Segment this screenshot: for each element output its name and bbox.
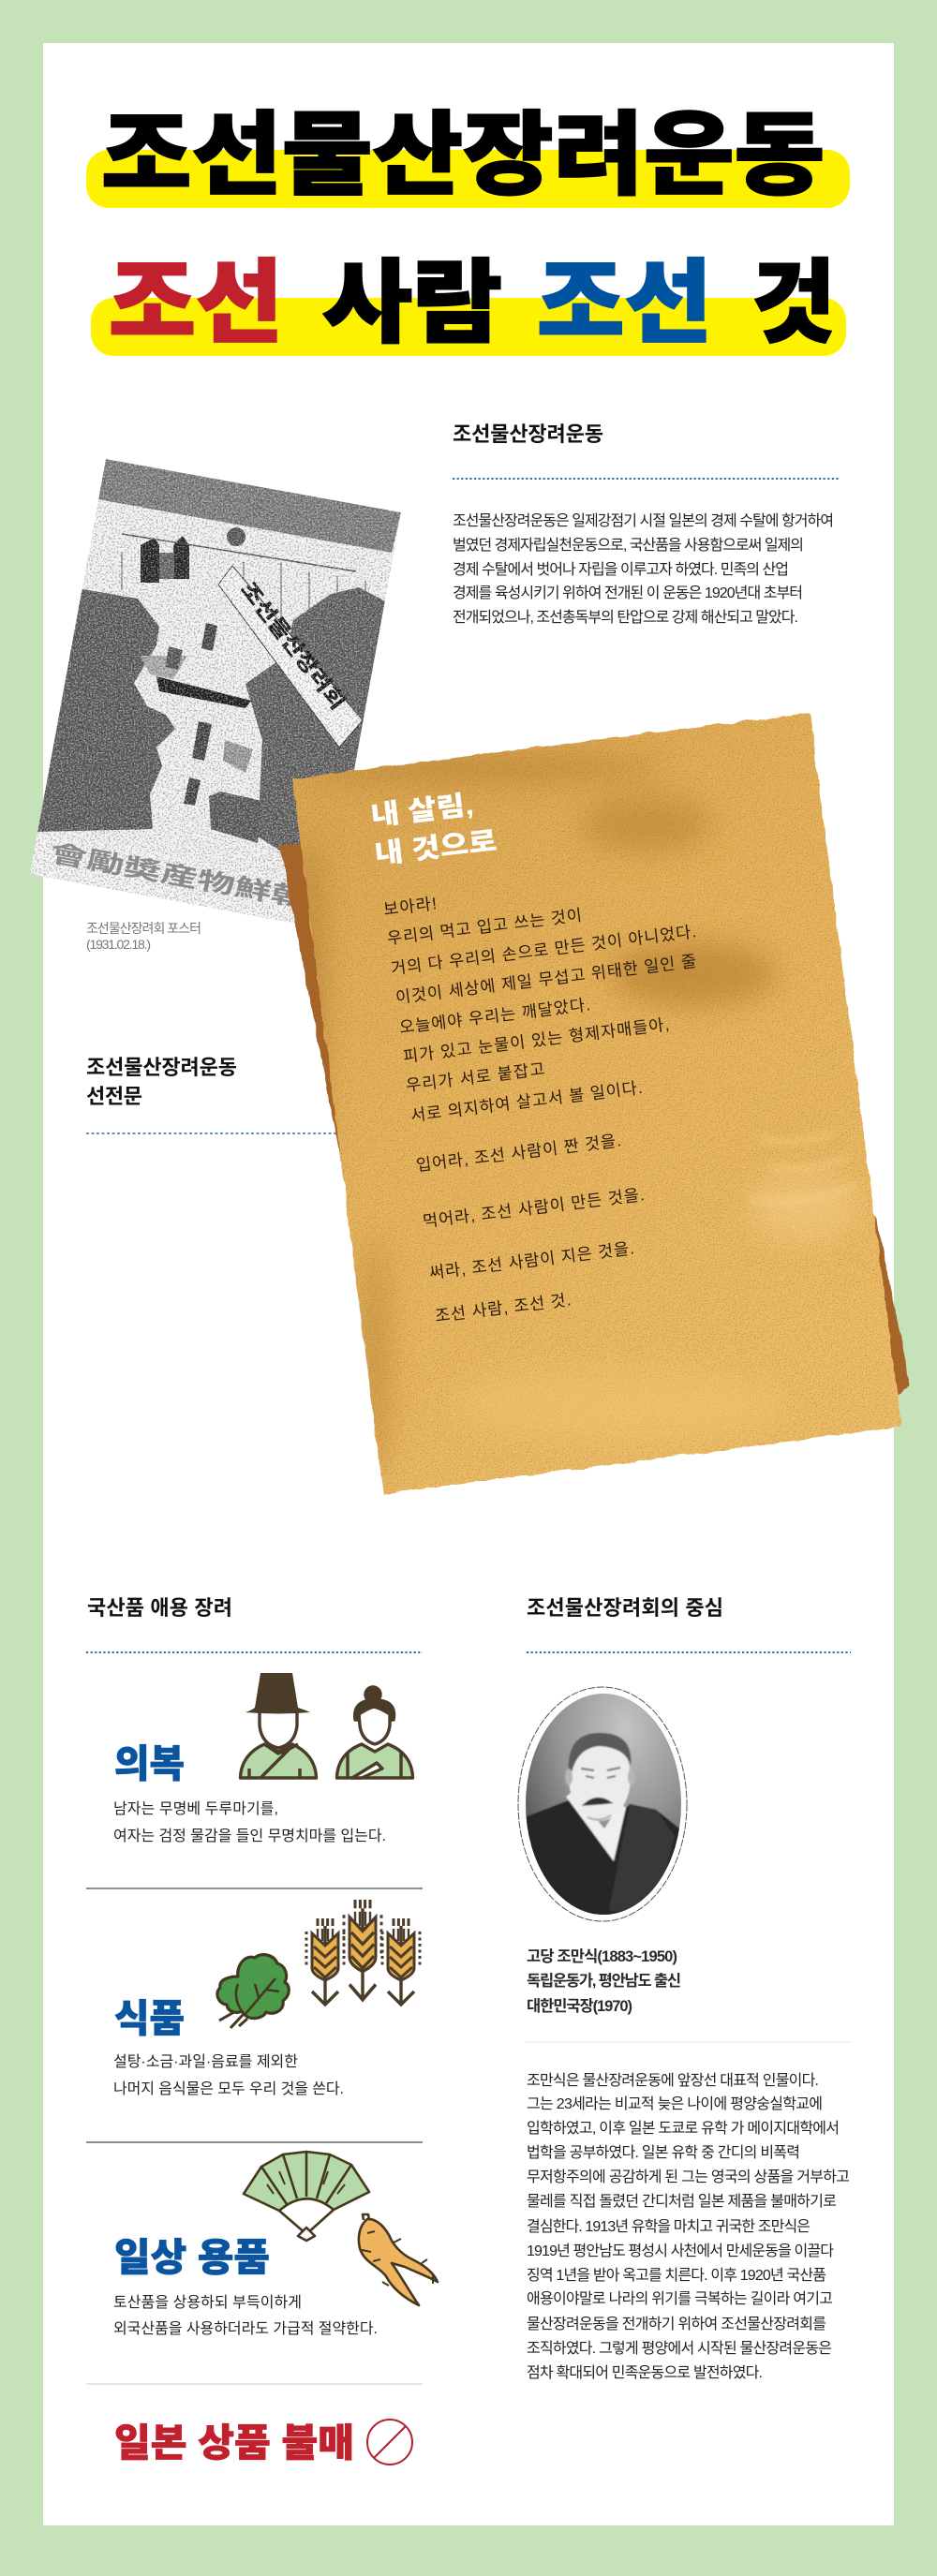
manifesto text: 오늘에야 우리는 깨달았다. [398, 995, 591, 1037]
heading: 국산품 애용 장려: 국산품 애용 장려 [87, 1596, 232, 1620]
manifesto text [382, 894, 697, 1325]
paper stains [298, 755, 862, 1480]
biography text block: 무저항주의에 공감하게 된 그는 영국의 상품을 거부하고 [527, 2169, 850, 2185]
section: 의복: 남자는 무명베 두루마기를, [113, 1800, 278, 1817]
section: 의복: 여자는 검정 물감을 들인 무명치마를 입는다. [113, 1828, 386, 1844]
biography text block: 조만식은 물산장려운동에 앞장선 대표적 인물이다. [527, 2072, 819, 2089]
heading: 조선물산장려회의 중심: 조선물산장려회의 중심 [527, 1596, 723, 1620]
front paper sheet [292, 713, 901, 1494]
intro text block: 조선물산장려운동은 일제강점기 시절 일본의 경제 수탈에 항거하여 [453, 512, 834, 529]
subtitle: 조선 사람 조선 것: 사람 [322, 252, 502, 354]
dotted divider for 선전문 [86, 1133, 347, 1134]
icon: man in hanbok [240, 1673, 317, 1778]
section: 식품 [113, 1997, 344, 2097]
heading: 조선물산장려운동: 조선물산장려운동 [453, 422, 603, 446]
icon: spinach [217, 1955, 289, 2028]
portrait caption: 고당 조만식(1883~1950) [527, 1947, 677, 1965]
biography text block: 물레를 직접 돌렸던 간디처럼 일본 제품을 불매하기로 [527, 2193, 837, 2210]
manifesto text: 우리의 먹고 입고 쓰는 것이 [386, 906, 583, 948]
section: 식품: 식품 [114, 1997, 185, 2040]
poster bottom hanja band: 會勵奬産物鮮朝 [48, 838, 311, 913]
title: 조선물산장려운동: 조선물산장려운동 [101, 104, 825, 206]
paper heading [369, 790, 498, 870]
manifesto text: 먹어라, 조선 사람이 만든 것을. [422, 1185, 646, 1231]
poster caption: (1931.02.18.) [86, 937, 151, 952]
manifesto text: 이것이 세상에 제일 무섭고 위태한 일인 줄 [394, 952, 697, 1007]
back paper sheet [280, 840, 911, 1405]
intro text block: 경제 수탈에서 벗어나 자립을 이루고자 하였다. 민족의 산업 [453, 561, 789, 578]
biography text block: 법학을 공부하였다. 일본 유학 중 간디의 비폭력 [527, 2144, 800, 2161]
section: 일상 용품: 토산품을 상용하되 부득이하게 [113, 2294, 302, 2311]
paper heading: 내 것으로 [373, 825, 498, 870]
section: 의복 [113, 1742, 386, 1844]
intro text block [453, 479, 840, 626]
icon: wheat sheaves [306, 1900, 420, 2005]
dotted divider right [527, 1651, 851, 1653]
biography text block: 징역 1년을 받아 옥고를 치른다. 이후 1920년 국산품 [527, 2267, 826, 2284]
section: 일상 용품: 일상 용품 [114, 2236, 270, 2279]
biography text block: 물산장려운동을 전개하기 위하여 조선물산장려회를 [527, 2316, 826, 2332]
biography text block: 1919년 평안남도 평성시 사천에서 만세운동을 이끌다 [527, 2243, 834, 2259]
biography text block: 결심한다. 1913년 유학을 마치고 귀국한 조만식은 [527, 2218, 811, 2235]
manifesto text: 우리가 서로 붙잡고 [405, 1059, 545, 1095]
paper creases [750, 1133, 857, 1202]
manifesto text: 조선 사람, 조선 것. [434, 1290, 572, 1325]
icon: ginseng [359, 2214, 438, 2305]
portrait caption: 독립운동가, 평안남도 출신 [527, 1972, 681, 1990]
section: 식품: 설탕·소금·과일·음료를 제외한 [113, 2053, 298, 2070]
heading: 조선물산장려운동 선전문: 선전문 [86, 1085, 142, 1108]
manifesto text: 서로 의지하여 살고서 볼 일이다. [409, 1078, 644, 1125]
intro text block: 경제를 육성시키기 위하여 전개된 이 운동은 1920년대 초부터 [453, 585, 803, 601]
biography text block: 입학하였고, 이후 일본 도쿄로 유학 가 메이지대학에서 [527, 2120, 840, 2137]
portrait caption: 대한민국장(1970) [527, 1997, 632, 2015]
heading: 조선물산장려운동 선전문 [86, 1056, 237, 1108]
intro text block: 벌였던 경제자립실천운동으로, 국산품을 사용함으로써 일제의 [453, 537, 804, 554]
poster caption: 조선물산장려회 포스터 [86, 921, 201, 936]
biography text block [527, 2072, 850, 2381]
icon: woman in hanbok [337, 1687, 412, 1778]
portrait caption [527, 1947, 681, 2015]
manifesto text: 보아라! [382, 894, 438, 919]
subtitle: 조선 사람 조선 것: 것 [751, 252, 836, 354]
biography text block: 조직하였다. 그렇게 평양에서 시작된 물산장려운동은 [527, 2340, 832, 2357]
section: 식품: 나머지 음식물은 모두 우리 것을 쓴다. [113, 2080, 344, 2097]
dotted divider left [86, 1651, 423, 1653]
manifesto text: 거의 다 우리의 손으로 만든 것이 아니었다. [390, 922, 697, 978]
biography text block: 그는 23세라는 비교적 늦은 나이에 평양숭실학교에 [527, 2095, 823, 2112]
sash text: 조선물산장려회 [236, 578, 350, 714]
manifesto text: 피가 있고 눈물이 있는 형제자매들아, [402, 1014, 670, 1066]
manifesto paper with text [280, 713, 911, 1494]
section: 의복: 의복 [114, 1742, 185, 1785]
callout: 일본 상품 불매: 일본 상품 불매 [114, 2421, 354, 2465]
section: 일상 용품: 외국산품을 사용하더라도 가급적 절약한다. [113, 2320, 378, 2337]
biography text block: 애용이야말로 나라의 위기를 극복하는 길이라 여기고 [527, 2290, 833, 2307]
poster caption [86, 921, 201, 952]
heading: 조선물산장려운동 선전문: 조선물산장려운동 [86, 1056, 237, 1079]
portrait photo: 조만식 [518, 1686, 689, 1921]
paper heading: 내 살림, [369, 790, 475, 832]
subtitle: 조선 사람 조선 것: 조선 [537, 252, 712, 354]
subtitle: 조선 사람 조선 것 [91, 252, 846, 356]
manifesto text: 써라, 조선 사람이 지은 것을. [428, 1238, 635, 1282]
poster image: 조선물산장려회 포스터 [30, 459, 401, 924]
section: 일상 용품 [113, 2236, 378, 2337]
subtitle: 조선 사람 조선 것: 조선 [109, 252, 283, 354]
icon: folding fan [244, 2152, 369, 2241]
manifesto text: 입어라, 조선 사람이 짠 것을. [415, 1131, 622, 1175]
intro text block: 전개되었으나, 조선총독부의 탄압으로 강제 해산되고 말았다. [453, 609, 798, 626]
biography text block: 점차 확대되어 민족운동으로 발전하였다. [527, 2364, 763, 2381]
icon: prohibition sign [367, 2420, 412, 2465]
